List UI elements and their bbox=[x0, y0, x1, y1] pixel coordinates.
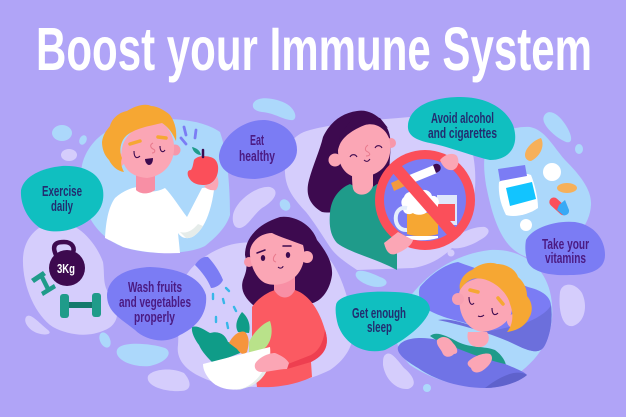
cigarette bbox=[391, 178, 405, 191]
neck bbox=[136, 172, 155, 193]
callout: take your vitamins: Take your bbox=[542, 236, 589, 253]
hair bbox=[308, 111, 391, 213]
bottle bbox=[499, 174, 538, 216]
hand bbox=[255, 353, 289, 372]
shirt bbox=[330, 184, 397, 270]
pillow bbox=[419, 262, 552, 351]
panel: apple boy backdrop bbox=[81, 119, 230, 253]
face bbox=[459, 278, 512, 332]
callout: take your vitamins: vitamins bbox=[545, 250, 586, 267]
callout: avoid alcohol and cigarettes: and cigarettes bbox=[428, 125, 497, 142]
apple bbox=[188, 156, 218, 185]
callout: take your vitamins bbox=[525, 222, 605, 275]
shirt bbox=[105, 187, 214, 253]
pills bbox=[525, 138, 543, 161]
panel: lavender area behind woman with sign bbox=[285, 117, 475, 270]
leaves bbox=[192, 327, 240, 363]
callout: wash fruits and vegetables properly: and vegetables bbox=[119, 294, 191, 311]
blanket bbox=[398, 338, 527, 388]
no sign bbox=[375, 150, 475, 250]
kettlebell bbox=[49, 250, 85, 286]
panel: sleep backdrop bbox=[396, 250, 552, 387]
panel: lavender area behind woman with vegetables bbox=[177, 242, 353, 387]
callout: avoid alcohol and cigarettes: Avoid alcohol bbox=[431, 110, 494, 127]
panel: vitamins backdrop bbox=[484, 127, 591, 259]
illustration: apple boy bbox=[102, 105, 218, 253]
face bbox=[250, 233, 304, 285]
hair bbox=[102, 105, 176, 172]
neck bbox=[352, 172, 373, 195]
bowl bbox=[203, 347, 270, 390]
illustration: sleeping boy bbox=[398, 262, 552, 388]
face bbox=[121, 123, 174, 178]
neck bbox=[467, 332, 489, 347]
callout: eat healthy: Eat bbox=[250, 132, 264, 149]
callout: exercise daily bbox=[21, 166, 103, 231]
hands bbox=[437, 337, 457, 357]
illustration: exercise gear: 3Kg bbox=[57, 261, 75, 276]
illustration: exercise gear bbox=[31, 242, 101, 318]
callout: get enough sleep bbox=[336, 292, 430, 351]
illustration: woman with vegetables bbox=[192, 217, 332, 390]
small dumbbell bbox=[31, 271, 56, 296]
hair bbox=[242, 217, 332, 305]
callout: wash fruits and vegetables properly bbox=[107, 267, 206, 340]
callout: get enough sleep: sleep bbox=[367, 319, 392, 336]
callout: avoid alcohol and cigarettes bbox=[408, 97, 515, 160]
hair bbox=[460, 263, 532, 332]
callout: exercise daily: daily bbox=[51, 198, 73, 215]
drinks bbox=[437, 195, 457, 225]
dumbbell bbox=[60, 293, 101, 318]
decorative blobs bbox=[25, 98, 585, 392]
callout: get enough sleep: Get enough bbox=[352, 305, 406, 322]
callout: wash fruits and vegetables properly: properly bbox=[134, 309, 175, 326]
ear bbox=[328, 154, 342, 166]
illustration: woman with no-smoking sign bbox=[308, 111, 475, 270]
bottle and water bbox=[195, 257, 223, 288]
callout: eat healthy: healthy bbox=[239, 148, 275, 165]
ears bbox=[111, 153, 125, 167]
callout: exercise daily: Exercise bbox=[42, 183, 82, 200]
top bbox=[252, 290, 327, 387]
callout: eat healthy bbox=[219, 120, 297, 179]
neck bbox=[274, 277, 295, 298]
panel: lavender area behind exercise bbox=[23, 222, 117, 335]
hands bbox=[440, 154, 458, 170]
illustration: vitamins bbox=[498, 138, 577, 231]
ears bbox=[301, 251, 313, 263]
pyjama bbox=[430, 334, 506, 366]
face bbox=[338, 124, 390, 177]
callout: wash fruits and vegetables properly: Wash fruits bbox=[128, 279, 182, 296]
